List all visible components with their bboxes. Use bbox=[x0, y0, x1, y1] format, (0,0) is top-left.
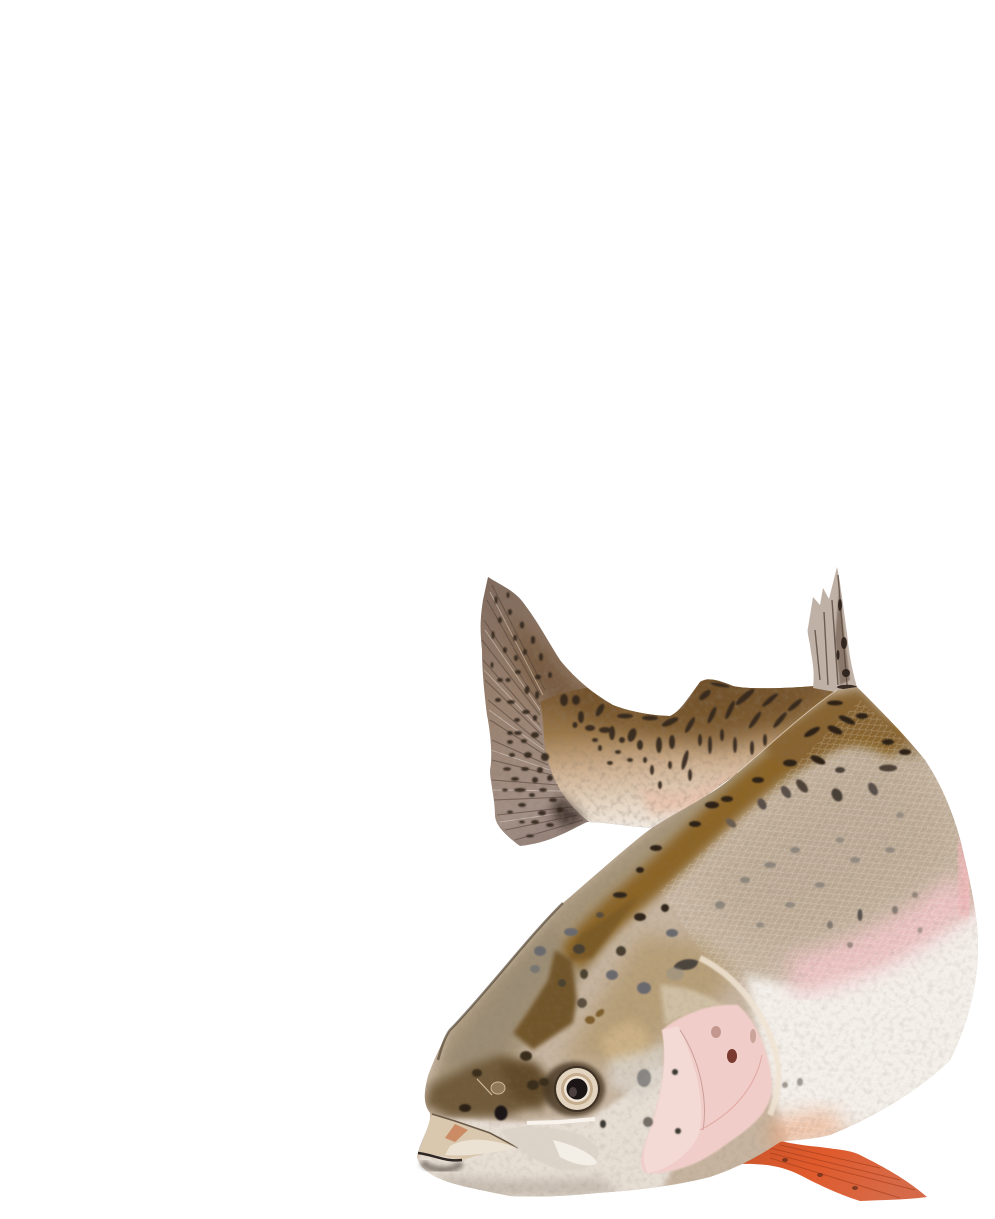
eye bbox=[543, 1062, 605, 1116]
scale texture bbox=[660, 700, 990, 1150]
silver speckle behind eye bbox=[608, 1040, 665, 1100]
head brown patch bbox=[513, 950, 577, 1050]
head golden cheek bbox=[560, 935, 735, 1080]
mouth bbox=[418, 1114, 518, 1170]
nostril bbox=[477, 1079, 505, 1095]
noise mottling bbox=[430, 729, 978, 1196]
body spots bbox=[459, 700, 922, 1134]
back highlight line bbox=[737, 690, 837, 773]
dorsal fin bbox=[808, 567, 858, 692]
head dark top edge bbox=[438, 903, 563, 1060]
tail fin rays bbox=[482, 585, 583, 840]
gill cover edge bbox=[700, 958, 779, 1115]
illustration: rainbow trout on white background bbox=[417, 567, 978, 1201]
snout dark bbox=[424, 1055, 553, 1118]
tail dark base bbox=[550, 795, 585, 828]
trout body bbox=[410, 680, 990, 1210]
lower head silver bbox=[417, 1065, 673, 1196]
back: brown band bbox=[570, 730, 900, 960]
belly warm tint near fin bbox=[770, 1110, 850, 1150]
upper flank bbox=[700, 735, 958, 950]
noise mottling tail bbox=[484, 590, 828, 827]
peduncle flesh bbox=[540, 678, 840, 828]
belly silver bbox=[745, 900, 990, 1150]
head grey crown bbox=[456, 940, 563, 1062]
lateral pink stripe bbox=[790, 890, 965, 975]
tail spots bbox=[490, 592, 804, 838]
brown wash at fin base bbox=[505, 610, 590, 710]
maxilla jaw bone bbox=[500, 1119, 598, 1170]
back: grey-tan shoulder bbox=[430, 687, 925, 1090]
pectoral fin bbox=[738, 1132, 927, 1201]
tail fin and peduncle bbox=[480, 577, 834, 846]
gill cover pink bbox=[641, 1005, 772, 1173]
